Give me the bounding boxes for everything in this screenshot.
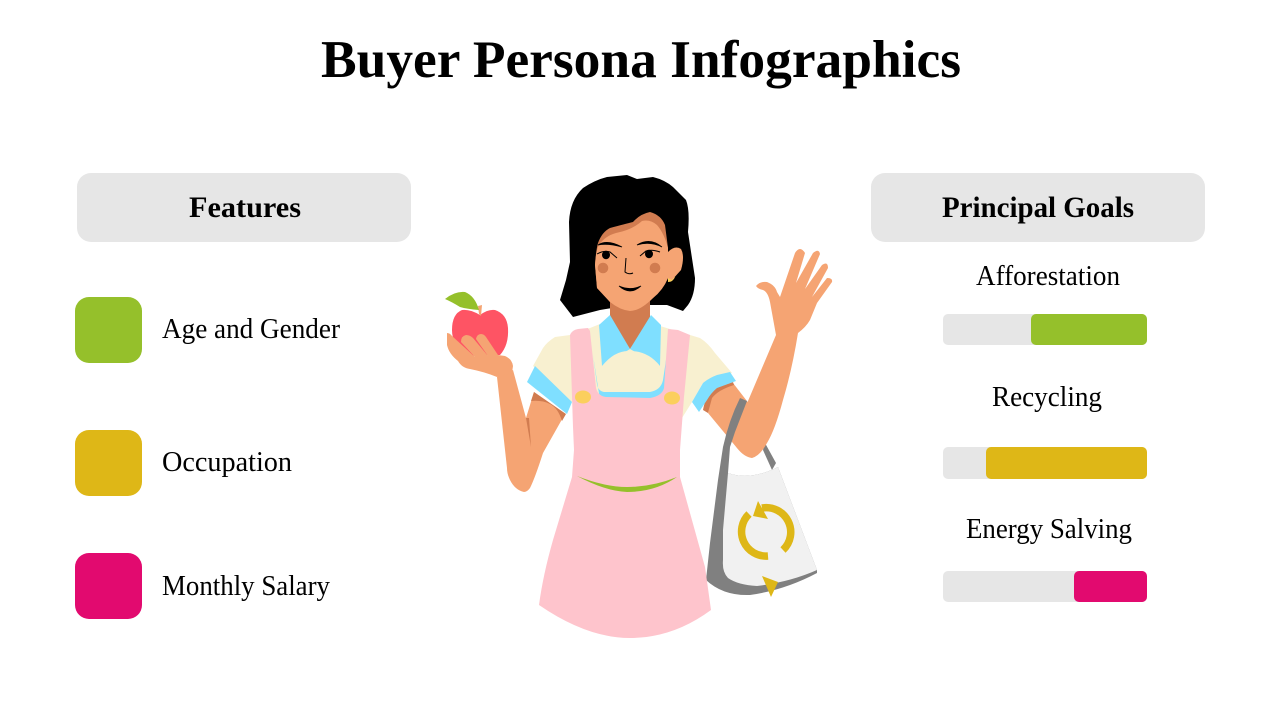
illustration: woman with apple and bag (445, 175, 832, 638)
right forearm and hand (733, 249, 832, 458)
right upper arm (708, 383, 760, 458)
title: Buyer Persona Infographics (321, 31, 961, 89)
apron (539, 328, 711, 638)
mouth (619, 286, 641, 291)
left hand (447, 333, 513, 377)
apple (445, 292, 508, 356)
face (595, 212, 668, 311)
goal: afforestation: Afforestation (976, 261, 1120, 292)
goal: afforestation (943, 261, 1147, 345)
panel: principal goals (871, 173, 1205, 602)
eyes and brows (597, 241, 662, 259)
feature: age and gender (75, 297, 341, 363)
left elbow crease (526, 418, 531, 447)
hair (560, 175, 695, 317)
ear and earring (668, 248, 683, 282)
left upper arm and forearm (497, 370, 565, 492)
left sleeve cuff (527, 366, 572, 414)
goal: energy salving: Energy Salving (966, 514, 1132, 545)
heading: principal goals: Principal Goals (942, 191, 1134, 224)
icon: recycle arrows (742, 501, 791, 597)
tote bag (706, 398, 817, 597)
icon: tote bag strap back (763, 443, 776, 470)
right arm shadow (703, 382, 734, 413)
apron pocket line (577, 476, 677, 492)
heading: features (77, 173, 411, 242)
left arm shadow (531, 392, 566, 421)
goal: recycling: Recycling (992, 382, 1102, 413)
feature: occupation: Occupation (162, 447, 292, 478)
goal: recycling (943, 382, 1147, 479)
feature: age and gender: Age and Gender (162, 314, 341, 345)
goal: energy salving (943, 514, 1147, 602)
nose (625, 258, 633, 274)
neck (610, 300, 650, 349)
right sleeve cuff (692, 372, 736, 412)
feature: monthly salary: Monthly Salary (162, 571, 330, 602)
heading: principal goals (871, 173, 1205, 242)
apron buttons (575, 390, 591, 404)
feature: occupation (75, 430, 292, 496)
shirt: cream sleeves and yoke (533, 320, 732, 418)
heading: features: Features (189, 191, 301, 224)
feature: monthly salary (75, 553, 330, 619)
collar (599, 315, 661, 380)
panel: features (75, 173, 411, 619)
cheeks (598, 263, 608, 273)
